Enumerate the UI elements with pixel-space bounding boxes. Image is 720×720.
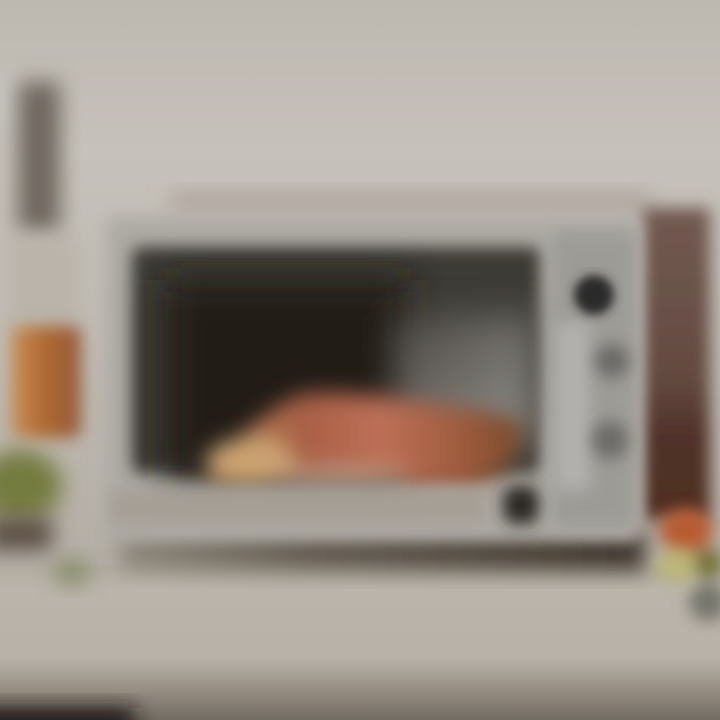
pale wall highlight at top-left [0, 75, 21, 135]
brown wooden board on the right [642, 208, 710, 520]
cavity lit right wall [395, 315, 535, 440]
top dial [574, 275, 614, 315]
bottle on the left [8, 82, 81, 438]
counter [0, 565, 720, 720]
tray and door bar [110, 490, 486, 524]
dark front-left corner [0, 708, 135, 720]
middle dial [595, 344, 629, 378]
cavity dark back wall [165, 280, 410, 480]
bottle orange contents [11, 326, 81, 438]
dark door latch [503, 486, 539, 524]
oven body [106, 216, 640, 540]
shadow beneath the oven [120, 532, 645, 570]
toaster oven [106, 216, 640, 540]
shelf shadow above the oven [170, 192, 650, 212]
tomato and vegetables on the right [655, 508, 720, 621]
bottle neck [18, 82, 60, 232]
green herb bowl [0, 450, 90, 585]
food on the tray [206, 393, 522, 488]
bottle shoulder [8, 238, 80, 328]
oven cavity [132, 247, 540, 473]
panel highlight strip [556, 322, 590, 490]
control panel [552, 232, 636, 528]
lower dial [592, 421, 628, 459]
